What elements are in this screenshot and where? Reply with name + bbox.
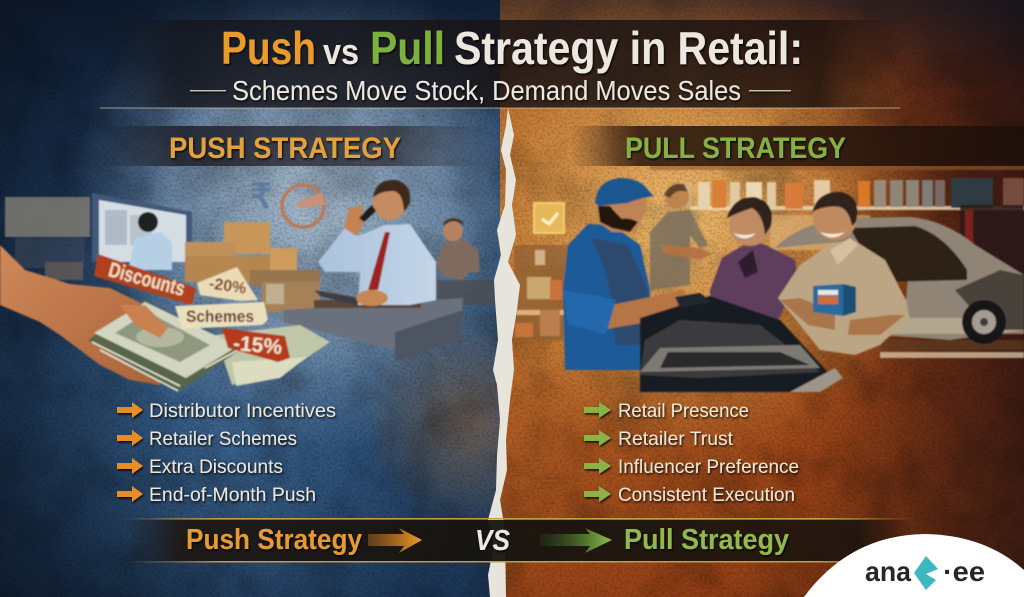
price tag: -20%: -20% xyxy=(208,276,247,298)
background boxes xyxy=(5,197,90,280)
price tag: Discounts xyxy=(94,254,196,305)
customer in khaki shirt xyxy=(778,192,910,355)
section heading: push xyxy=(100,126,490,166)
title: Pull xyxy=(370,22,445,74)
title: vs xyxy=(323,31,359,72)
shelves with products xyxy=(514,165,1024,340)
title: Push xyxy=(221,22,316,74)
section heading: push: PUSH STRATEGY xyxy=(169,132,401,165)
product box xyxy=(813,284,856,316)
price tag: Discounts: Discounts xyxy=(106,259,187,301)
vs label: VS xyxy=(475,525,511,557)
second cash stack xyxy=(215,325,330,386)
thumb over cash xyxy=(120,305,168,338)
arrow bullet and item: Consistent Execution: Consistent Execution xyxy=(618,484,795,506)
title: Strategy in Retail: xyxy=(454,22,803,74)
hand with cash xyxy=(0,245,168,385)
logo wordmark: ee: ·ee xyxy=(943,556,985,587)
price tag: Schemes xyxy=(175,302,268,329)
logo badge xyxy=(804,534,1024,597)
list: pull strategy points xyxy=(584,400,799,506)
illustration: push scene xyxy=(0,178,500,392)
arrow bullet and item: End-of-Month Push: End-of-Month Push xyxy=(149,484,316,506)
logo wordmark: ana: ana xyxy=(865,556,911,587)
title xyxy=(221,22,803,74)
price tag: -15%: -15% xyxy=(232,332,283,359)
customer in purple shirt xyxy=(710,197,798,320)
section heading: pull: PULL STRATEGY xyxy=(625,132,846,165)
price tag: -20% xyxy=(197,267,258,301)
subtitle: Schemes Move Stock, Demand Moves Sales xyxy=(232,75,741,106)
arrow bullet and item: Influencer Preference: Influencer Preference xyxy=(618,456,799,478)
illustration: pull scene xyxy=(514,165,1024,392)
label: Push Strategy: Push Strategy xyxy=(186,524,362,556)
background worker at desk xyxy=(436,218,500,305)
rupee and chart icons: ₹ xyxy=(250,178,272,216)
arrow bullet and item: Retail Presence: Retail Presence xyxy=(618,400,749,422)
computer monitor with worker xyxy=(92,193,192,270)
section heading: pull xyxy=(570,126,1024,166)
logo mark: teal diamond xyxy=(914,556,938,590)
arrow bullet and item: Retailer Schemes: Retailer Schemes xyxy=(149,428,297,450)
arrow bullet and item: Distributor Incentives: Distributor Incentives xyxy=(149,400,336,422)
background: rust right half xyxy=(500,0,1024,597)
arrow: push xyxy=(368,528,422,553)
desk xyxy=(283,298,463,362)
list: push strategy points xyxy=(117,400,336,506)
cardboard boxes xyxy=(185,222,320,312)
price tag: -15% xyxy=(222,328,290,362)
cash stack xyxy=(88,300,240,392)
arrow: pull xyxy=(540,528,612,553)
mechanic in blue xyxy=(563,178,690,370)
bottom comparison band xyxy=(125,518,915,562)
open car hood and engine xyxy=(640,293,843,392)
arrow bullet and item: Retailer Trust: Retailer Trust xyxy=(618,428,734,450)
background: blue left half xyxy=(0,0,512,597)
label: Pull Strategy: Pull Strategy xyxy=(624,524,789,556)
torn paper divider xyxy=(488,108,520,597)
price tag: Schemes: Schemes xyxy=(186,307,254,326)
title band xyxy=(100,20,900,109)
rupee and chart icons xyxy=(250,178,325,227)
man on phone xyxy=(314,180,436,306)
parked car xyxy=(775,217,1024,358)
background worker xyxy=(650,184,712,290)
arrow bullet and item: Extra Discounts: Extra Discounts xyxy=(149,456,283,478)
